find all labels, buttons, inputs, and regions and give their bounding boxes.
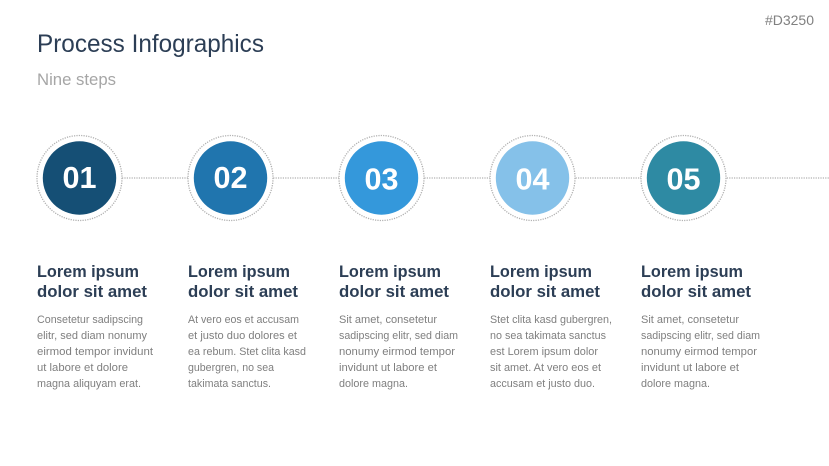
step 04 body text: accusam et justo duo. (490, 378, 595, 390)
subtitle: Nine steps (37, 70, 116, 89)
step 05 body text: sadipscing elitr, sed diam (641, 330, 760, 342)
panel: step 02 (188, 136, 306, 390)
step 03 badge (339, 136, 424, 220)
step 05 heading: dolor sit amet (641, 283, 752, 301)
step 01 badge (37, 136, 122, 220)
step 05 body text (641, 314, 760, 390)
step 03 heading: dolor sit amet (339, 283, 450, 301)
step 02 body text (188, 314, 306, 390)
step 04 body text: est Lorem ipsum dolor (490, 346, 598, 358)
step 05 body text: nonumy eirmod tempor (641, 346, 757, 358)
step 02 badge (188, 136, 273, 220)
step 01 body text: elitr, sed diam nonumy (37, 330, 148, 342)
document code: #D3250 (765, 12, 814, 28)
step 01 body text: eirmod tempor invidunt (37, 346, 153, 358)
step 02 badge: 02 (214, 160, 248, 195)
step 05 badge (641, 136, 726, 220)
step 03 body text: nonumy eirmod tempor (339, 346, 455, 358)
step 02 heading (188, 263, 299, 301)
step 05 heading: Lorem ipsum (641, 263, 743, 281)
step 05 heading (641, 263, 752, 301)
step 02 body text: At vero eos et accusam (188, 314, 299, 326)
step 01 heading: dolor sit amet (37, 283, 148, 301)
step 04 badge (490, 136, 575, 220)
step 03 badge: 03 (364, 162, 398, 196)
step 04 body text: sit amet. At vero eos et (490, 362, 601, 374)
step 05 body text: dolore magna. (641, 378, 710, 390)
panel: step 01 (37, 136, 153, 390)
step 01 body text: ut labore et dolore (37, 362, 128, 374)
step 05 badge: 05 (666, 162, 700, 196)
step 04 body text (490, 314, 612, 390)
step 02 heading: Lorem ipsum (188, 263, 290, 281)
step 02 body text: et justo duo dolores et (188, 330, 297, 342)
panel: step 03 (339, 136, 458, 390)
step 01 body text (37, 314, 153, 390)
step 04 heading: dolor sit amet (490, 283, 601, 301)
step 01 body text: Consetetur sadipscing (37, 314, 143, 326)
step 04 badge: 04 (516, 162, 550, 196)
step 04 body text: Stet clita kasd gubergren, (490, 314, 612, 326)
step 03 body text (339, 314, 458, 390)
step 03 body text: dolore magna. (339, 378, 408, 390)
step 03 body text: Sit amet, consetetur (339, 314, 437, 326)
step 02 body text: ea rebum. Stet clita kasd (188, 346, 306, 358)
step 02 body text: takimata sanctus. (188, 378, 271, 390)
step 04 body text: no sea takimata sanctus (490, 330, 607, 342)
step 01 heading: Lorem ipsum (37, 263, 139, 281)
step 01 body text: magna aliquyam erat. (37, 378, 141, 390)
step 05 body text: Sit amet, consetetur (641, 314, 739, 326)
panel: step 04 (490, 136, 612, 390)
step 04 heading: Lorem ipsum (490, 263, 592, 281)
step 04 heading (490, 263, 601, 301)
step 03 heading (339, 263, 450, 301)
step 02 heading: dolor sit amet (188, 283, 299, 301)
title: Process Infographics (37, 30, 264, 58)
step 03 body text: sadipscing elitr, sed diam (339, 330, 458, 342)
panel: step 05 (641, 136, 760, 390)
step 02 body text: gubergren, no sea (188, 362, 274, 374)
step 01 heading (37, 263, 148, 301)
step 03 heading: Lorem ipsum (339, 263, 441, 281)
step 03 body text: invidunt ut labore et (339, 362, 437, 374)
timeline connector (122, 177, 829, 179)
step 05 body text: invidunt ut labore et (641, 362, 739, 374)
step 01 badge: 01 (62, 160, 96, 195)
